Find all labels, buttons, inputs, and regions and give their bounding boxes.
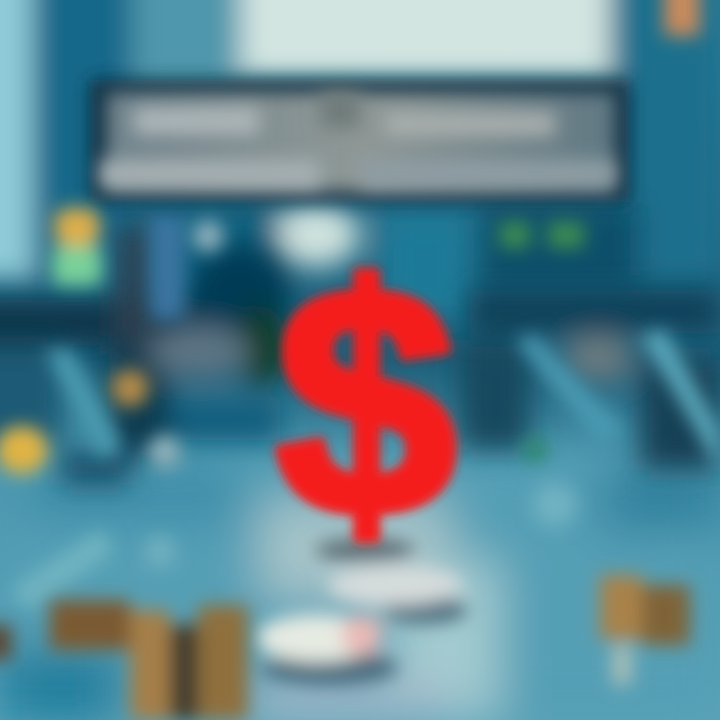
small glowing lights [0,0,700,568]
background: buildings at top [0,0,720,320]
mid-ground dark bands [0,225,720,485]
title text, unreadable in the reference [100,92,615,188]
icon: white coin stacks [256,538,467,684]
icon: red dollar sign: $ [276,220,456,583]
icon: gold coin stack right [600,575,690,685]
slanted light-blue panels [10,215,720,610]
icon: gold coin stacks left [0,600,248,720]
title banner [90,80,630,202]
banner panel [90,80,630,202]
icon: traffic-light badge [52,208,102,286]
